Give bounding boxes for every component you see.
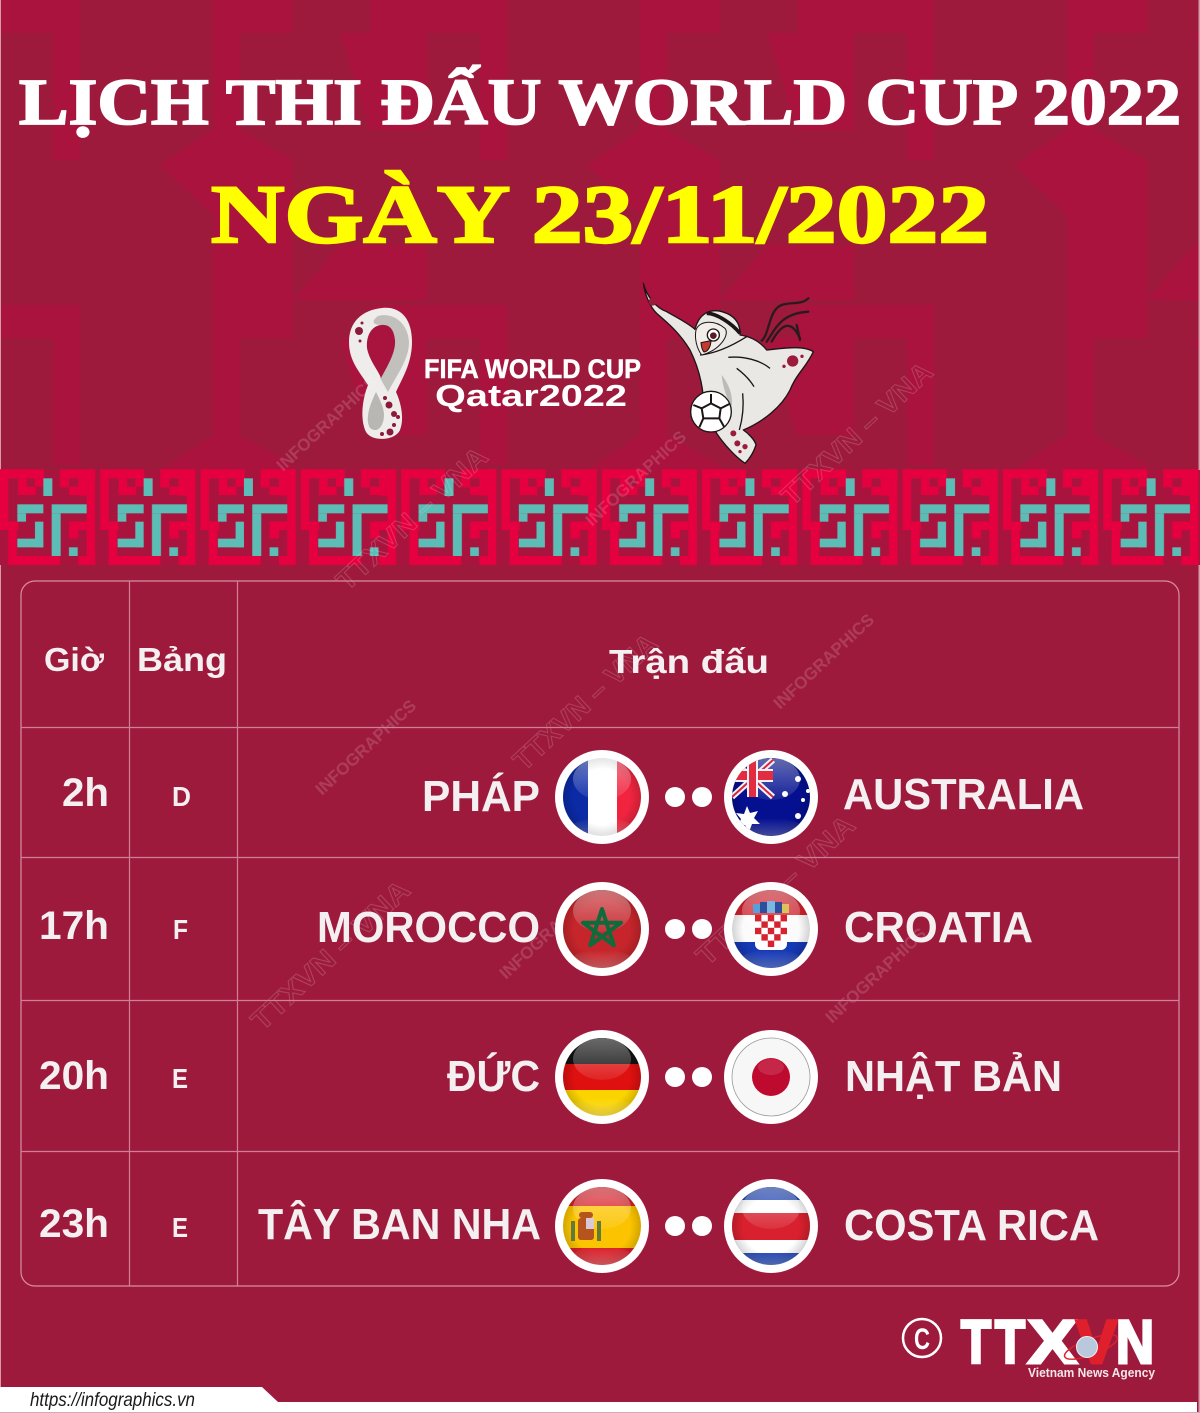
icon: flag of France <box>555 750 649 844</box>
row: Tây Ban Nha vs Costa Rica: TÂY BAN NHA <box>258 1199 541 1249</box>
row: Pháp vs Australia: D <box>172 781 191 812</box>
row: Pháp vs Australia <box>62 750 1084 844</box>
watermarks <box>245 356 939 1036</box>
watermarks: TTXVN – VNA <box>330 441 494 596</box>
row: Đức vs Nhật Bản: ĐỨC <box>447 1051 540 1101</box>
FIFA World Cup logo <box>349 308 641 439</box>
row: Morocco vs Croatia: MOROCCO <box>317 903 540 952</box>
table header <box>44 641 769 680</box>
row: Đức vs Nhật Bản: 20h <box>39 1054 109 1098</box>
watermarks: INFOGRAPHICS <box>496 880 604 983</box>
table grid lines <box>21 581 1179 1286</box>
copyright mark <box>903 1319 941 1357</box>
icon: flag of Spain <box>555 1179 649 1273</box>
row: Pháp vs Australia: AUSTRALIA <box>843 770 1084 819</box>
logo wordmark: Qatar2022 <box>435 378 627 413</box>
table header: Giờ <box>44 641 105 678</box>
globe emblem <box>1062 1330 1120 1364</box>
date heading: NGÀY 23/11/2022 <box>211 168 989 260</box>
row: Morocco vs Croatia <box>39 882 1033 976</box>
row: Tây Ban Nha vs Costa Rica <box>39 1179 1099 1273</box>
watermarks: INFOGRAPHICS <box>312 696 420 799</box>
wordmark <box>961 1308 1154 1376</box>
row: Morocco vs Croatia: F <box>173 914 188 945</box>
mascot ornaments <box>649 298 804 453</box>
mascot La'eeb <box>643 283 813 463</box>
table header: Bảng <box>137 641 227 678</box>
agency name: Vietnam News Agency <box>1028 1365 1156 1380</box>
mascot grey shading <box>722 375 732 407</box>
watermarks: TTXVN – VNA <box>775 356 939 511</box>
row: Đức vs Nhật Bản <box>39 1030 1062 1124</box>
mascot face <box>695 313 740 355</box>
wordmark: T <box>961 1308 991 1376</box>
match separator dots <box>665 1216 712 1236</box>
row: Morocco vs Croatia: 17h <box>39 904 109 948</box>
icon: trophy emblem <box>349 308 412 439</box>
watermarks: TTXVN – VNA <box>507 628 663 776</box>
decorative band <box>0 460 1200 570</box>
title: LỊCH THI ĐẤU WORLD CUP 2022 <box>19 65 1181 139</box>
watermarks: INFOGRAPHICS <box>582 427 690 530</box>
watermarks: TTXVN – VNA <box>245 874 416 1036</box>
row: Morocco vs Croatia: CROATIA <box>844 903 1033 952</box>
watermarks: INFOGRAPHICS <box>273 372 381 475</box>
watermarks: INFOGRAPHICS <box>770 610 878 713</box>
watermarks: TTXVN – VNA <box>690 809 861 971</box>
table frame <box>21 581 1179 1286</box>
icon: flag of Croatia <box>724 882 818 976</box>
row: Đức vs Nhật Bản: NHẬT BẢN <box>845 1051 1062 1101</box>
wordmark: T <box>995 1308 1025 1376</box>
wordmark: N <box>1116 1308 1154 1376</box>
footer strip <box>0 1387 1200 1413</box>
wordmark: X <box>1028 1308 1077 1376</box>
row: Pháp vs Australia: 2h <box>62 771 109 815</box>
icon: flag of Germany <box>555 1030 649 1124</box>
match separator dots <box>665 787 712 807</box>
watermarks: INFOGRAPHICS <box>822 924 930 1027</box>
wordmark: V <box>1076 1308 1117 1376</box>
logo wordmark: FIFA WORLD CUP <box>424 354 641 384</box>
football <box>691 391 731 432</box>
row: Tây Ban Nha vs Costa Rica: COSTA RICA <box>844 1201 1099 1250</box>
icon: flag of Morocco <box>555 882 649 976</box>
row: Tây Ban Nha vs Costa Rica: E <box>172 1212 188 1243</box>
match separator dots <box>665 919 712 939</box>
match separator dots <box>665 1067 712 1087</box>
icon: flag of Costa Rica <box>724 1179 818 1273</box>
TTXVN logo <box>961 1308 1156 1380</box>
mascot tassels <box>762 298 808 342</box>
icon: flag of Japan <box>724 1030 818 1124</box>
icon: flag of Australia <box>724 750 818 844</box>
row: Đức vs Nhật Bản: E <box>172 1063 188 1094</box>
website url: https://infographics.vn <box>30 1390 195 1411</box>
row: Tây Ban Nha vs Costa Rica: 23h <box>39 1202 109 1246</box>
row: Pháp vs Australia: PHÁP <box>422 771 540 821</box>
mascot fold shading <box>700 337 770 430</box>
logo wordmark <box>424 354 641 413</box>
mascot body <box>643 283 813 463</box>
schedule table <box>21 581 1179 1286</box>
table header: Trận đấu <box>609 643 769 680</box>
copyright mark: C <box>914 1323 930 1356</box>
